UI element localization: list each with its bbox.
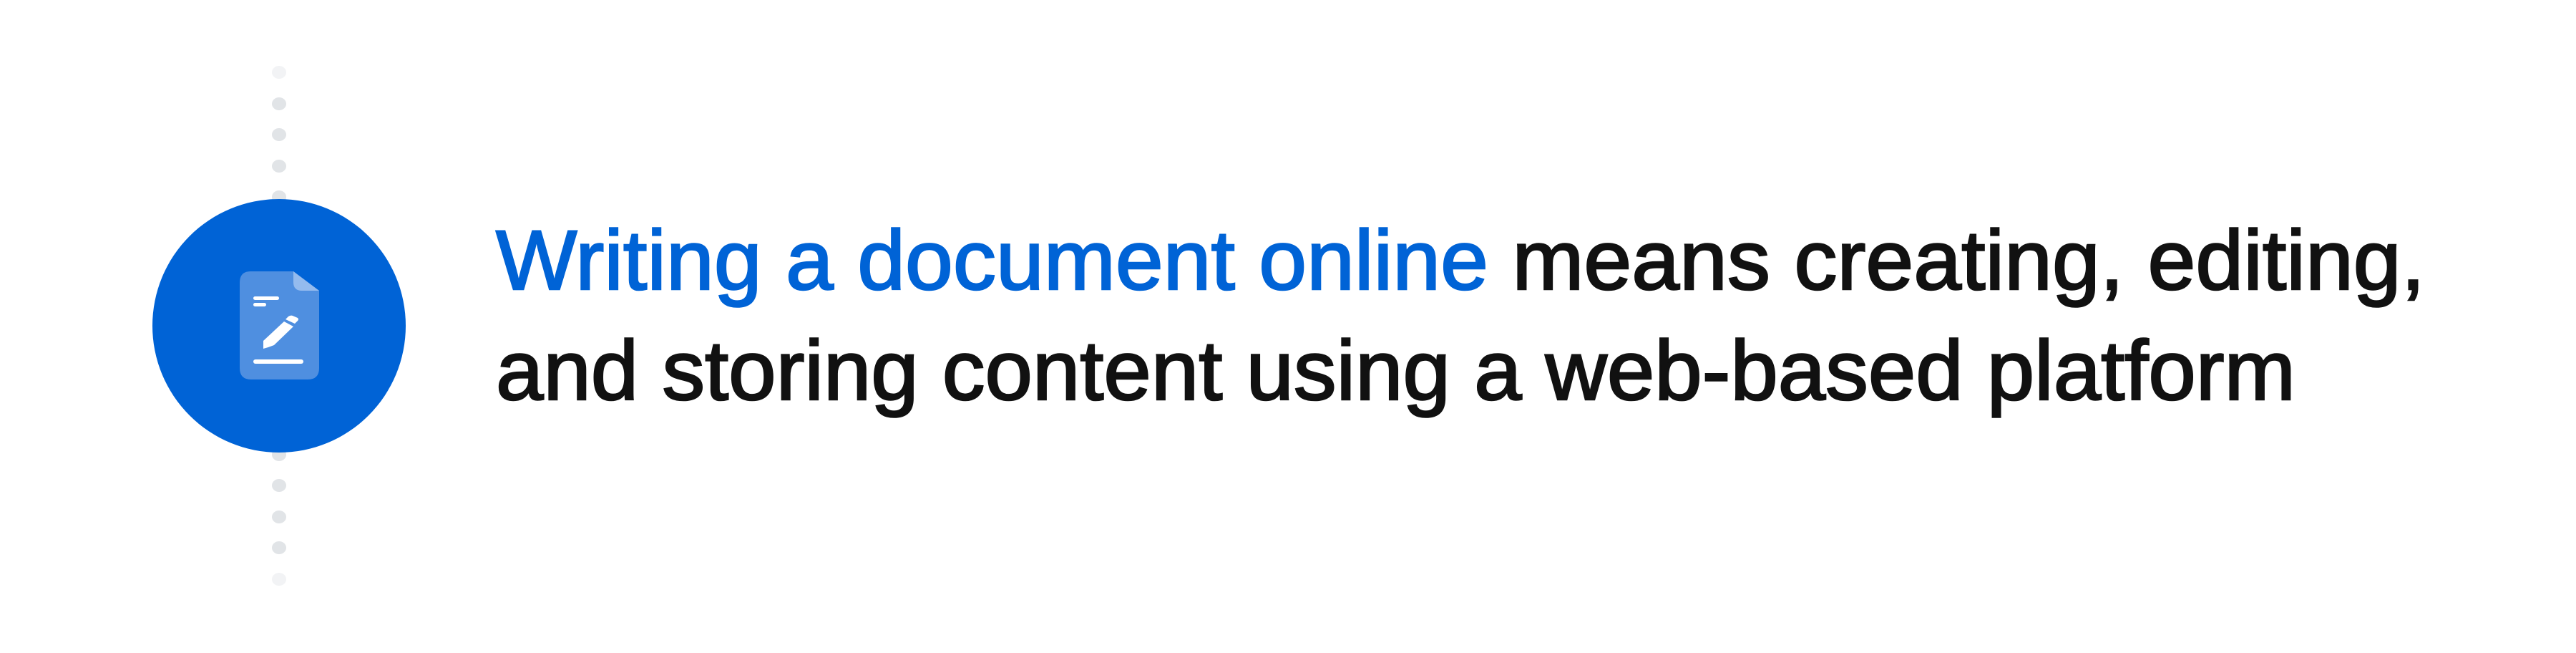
icon circle bbox=[152, 199, 406, 453]
dotted timeline bbox=[272, 66, 286, 586]
icon: document with pencil bbox=[240, 271, 319, 379]
text: definition: Writing a document online means creating, editing, bbox=[496, 213, 2425, 308]
text: definition: and storing content using a web-based platform bbox=[496, 324, 2296, 418]
text: definition bbox=[496, 213, 2425, 418]
